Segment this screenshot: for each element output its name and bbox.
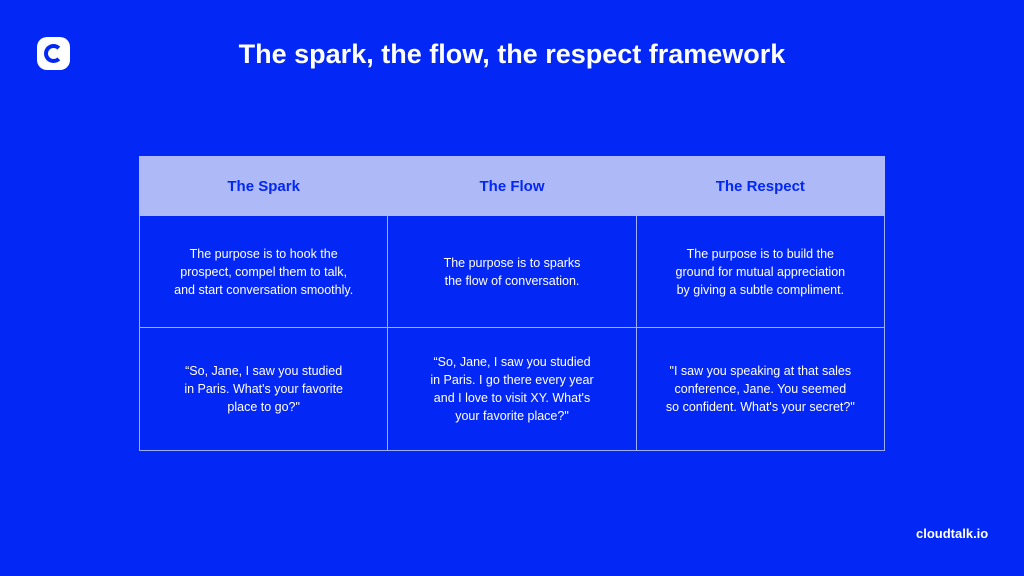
title: The spark, the flow, the respect framework	[239, 39, 785, 69]
table: framework: prospect, compel them to talk,	[180, 264, 347, 278]
table: framework: “So, Jane, I saw you studied	[185, 364, 342, 378]
table: framework: in Paris. What's your favorite	[184, 382, 343, 396]
table: framework: “So, Jane, I saw you studied	[433, 355, 591, 369]
table: framework: the flow of conversation.	[445, 274, 579, 288]
table: framework: The Flow	[480, 178, 544, 194]
table: framework	[139, 156, 885, 451]
table: framework: in Paris. I go there every year	[430, 373, 594, 387]
table: framework: The Spark	[227, 178, 300, 194]
table: framework: so confident. What's your secret?"	[666, 400, 855, 414]
table: framework: The Respect	[716, 178, 805, 194]
table: framework: place to go?"	[227, 400, 300, 414]
footer brand: cloudtalk.io	[916, 526, 988, 541]
table: framework: by giving a subtle compliment.	[677, 282, 844, 296]
table: framework: The purpose is to hook the	[190, 246, 338, 260]
table: framework: conference, Jane. You seemed	[674, 382, 846, 396]
logo icon	[37, 37, 70, 70]
table: framework: The purpose is to sparks	[444, 256, 580, 270]
table: framework: and I love to visit XY. What's	[434, 391, 590, 405]
table: framework: The purpose is to build the	[687, 246, 834, 260]
table: framework: "I saw you speaking at that sales	[670, 364, 851, 378]
table: framework: your favorite place?"	[455, 409, 569, 423]
table: framework: and start conversation smoothly.	[174, 282, 353, 296]
table: framework: ground for mutual appreciation	[676, 264, 845, 278]
